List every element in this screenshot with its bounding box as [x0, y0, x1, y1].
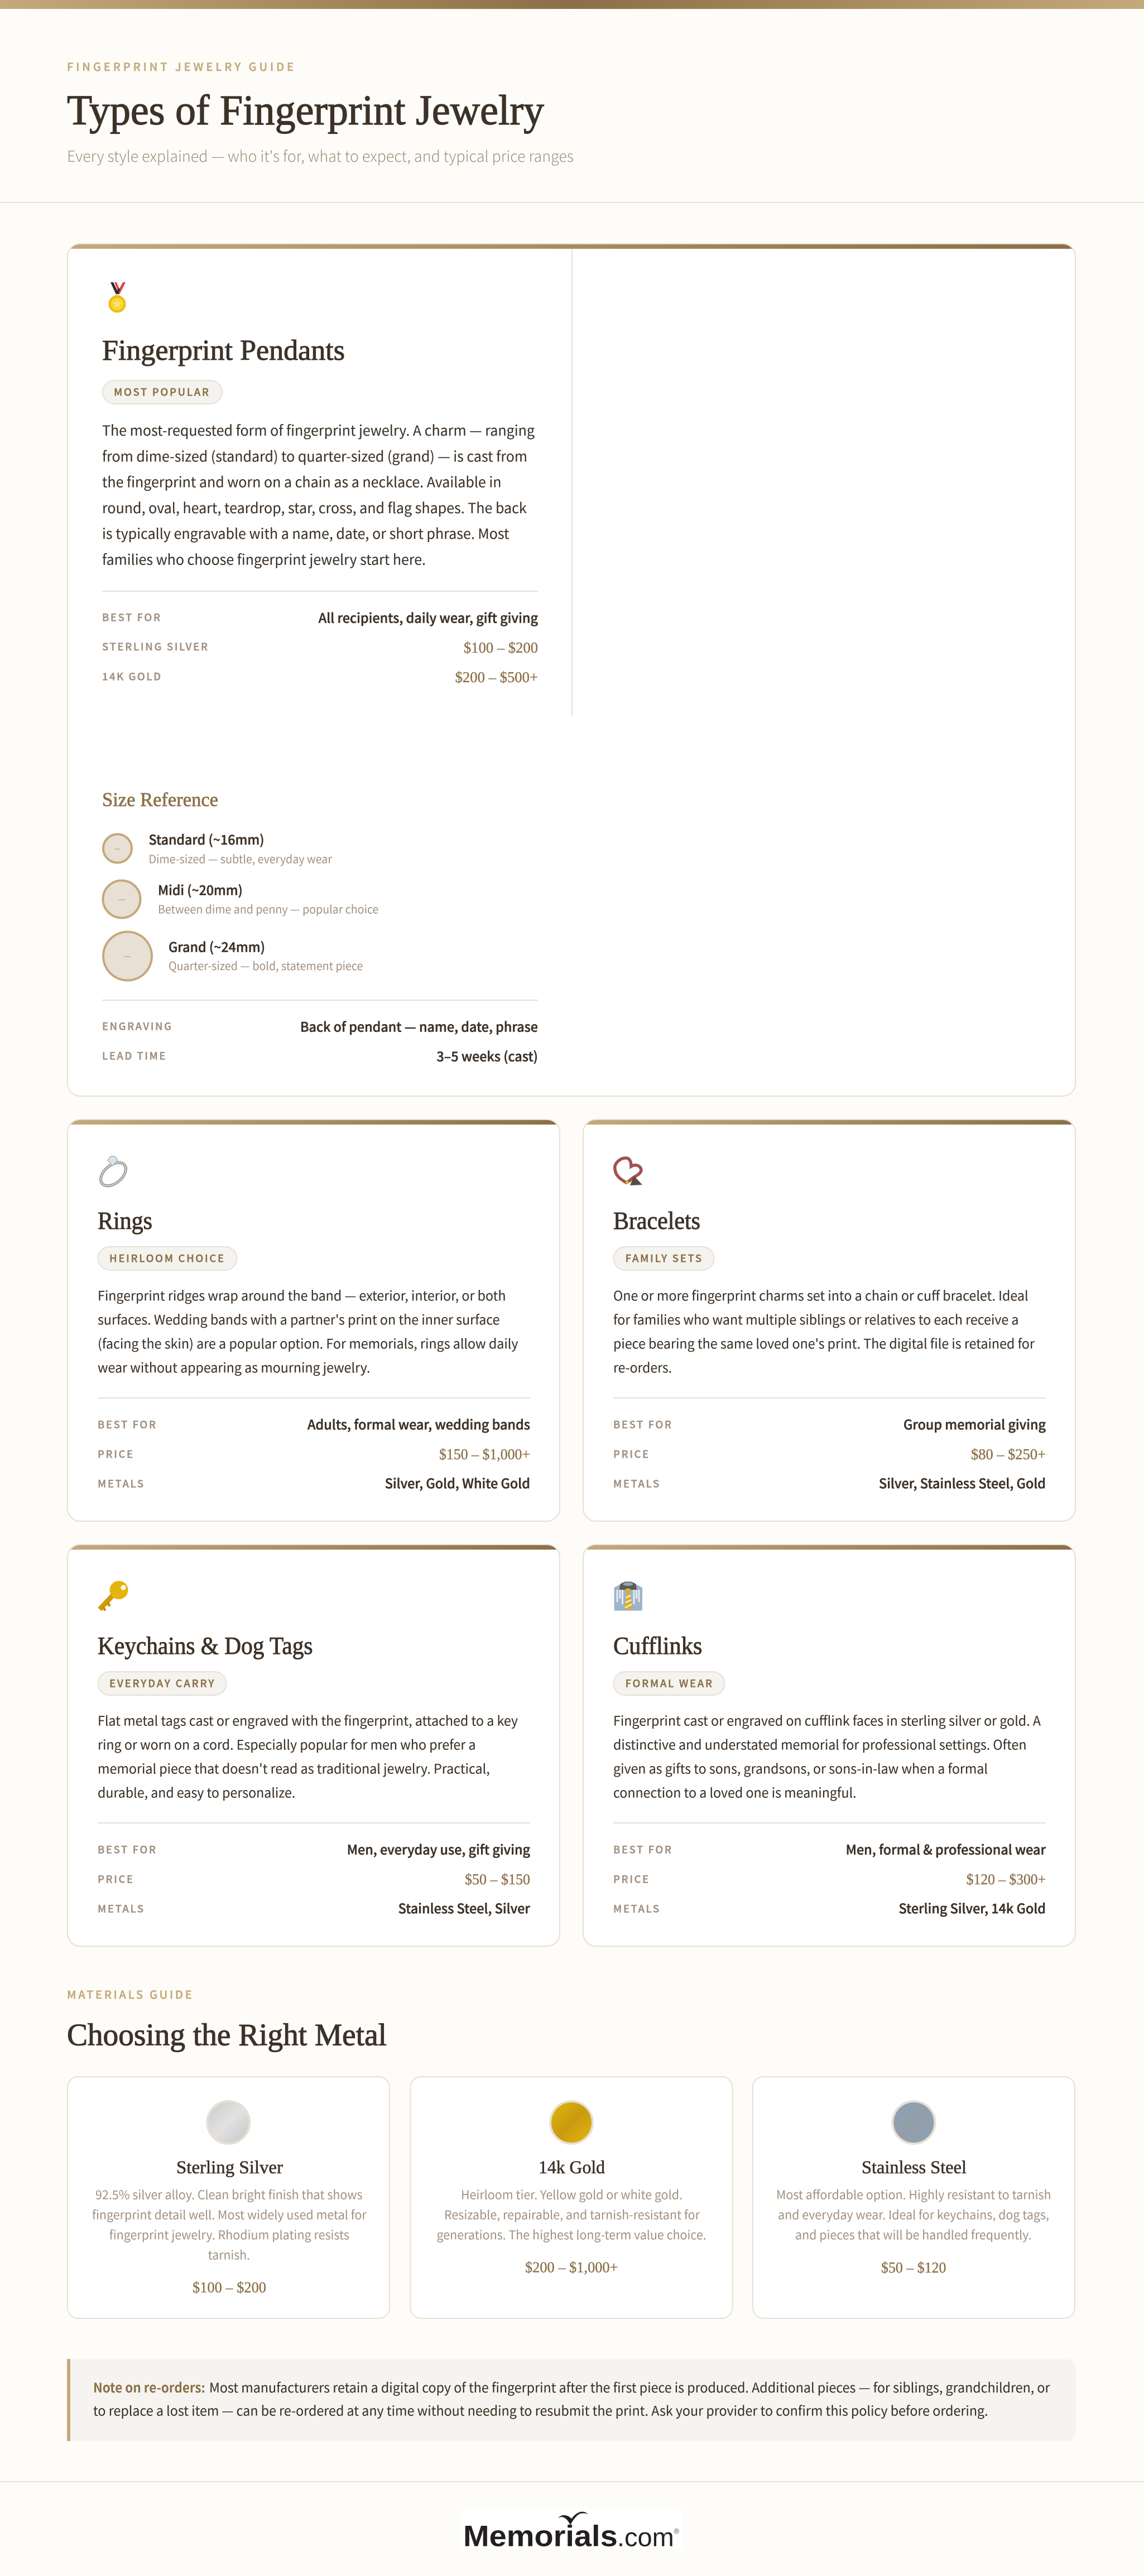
eyebrow: MATERIALS GUIDE	[67, 1986, 192, 2002]
size: standard	[103, 829, 332, 866]
description: surfaces. Wedding bands with a partner's print on the inner surface	[98, 1310, 500, 1329]
description: Flat metal tags cast or engraved with the fingerprint, attached to a key	[98, 1711, 518, 1730]
logo: Memorials.com: .com	[617, 2522, 674, 2551]
badge	[98, 1672, 227, 1695]
spec rows: Adults, formal wear, wedding bands	[307, 1415, 530, 1434]
engraving and lead time rows: 3–5 weeks (cast)	[436, 1046, 538, 1065]
panel: sterling silver	[68, 2077, 390, 2318]
description	[613, 1286, 1035, 1376]
spec rows: $120 – $300+	[967, 1871, 1046, 1888]
description: Most affordable option. Highly resistant to tarnish	[776, 2186, 1051, 2203]
spec rows: PRICE	[613, 1871, 648, 1886]
description: given as gifts to sons, grandsons, or sons-in-law when a formal	[613, 1758, 988, 1777]
size: standard: —	[114, 843, 121, 854]
spec rows: Silver, Stainless Steel, Gold	[879, 1473, 1046, 1492]
callout: note on re-orders: to replace a lost item — can be re-ordered at any time without needing to resubmit the print. Ask your provider to confirm this policy before ordering.	[93, 2401, 988, 2420]
spec rows	[613, 1415, 1046, 1492]
panel: fingerprint pendants	[68, 244, 1075, 1096]
badge	[614, 1672, 724, 1695]
description: ring or worn on a cord. Especially popular for men who prefer a	[98, 1735, 476, 1754]
spec rows: BEST FOR	[613, 1842, 671, 1856]
spec rows	[98, 1415, 530, 1492]
badge: FAMILY SETS	[626, 1251, 701, 1265]
panel: 14k gold	[411, 2077, 732, 2318]
icon: medal	[108, 282, 126, 312]
spec rows	[613, 1840, 1046, 1917]
description: wear without appearing as mourning jewelry.	[98, 1357, 370, 1376]
heading: Cufflinks	[613, 1632, 702, 1660]
spec rows: Group memorial giving	[903, 1415, 1046, 1434]
description: tarnish.	[208, 2246, 250, 2264]
badge	[614, 1247, 714, 1270]
spec rows: Stainless Steel, Silver	[398, 1898, 530, 1917]
description: the fingerprint and worn on a chain as a necklace. Available in	[102, 471, 501, 492]
price: $100 – $200	[193, 2279, 266, 2295]
panel: stainless steel	[753, 2077, 1075, 2318]
icon: beads	[615, 1158, 642, 1185]
description	[776, 2186, 1051, 2244]
description: Fingerprint ridges wrap around the band — exterior, interior, or both	[98, 1286, 506, 1305]
callout: note on re-orders: Note on re-orders:	[93, 2377, 205, 2396]
top accent bar	[0, 0, 1144, 9]
size: standard: Standard (~16mm)	[148, 829, 265, 848]
badge	[103, 380, 222, 404]
spec rows: $50 – $150	[465, 1871, 530, 1888]
icon: ring	[97, 1156, 130, 1190]
description: fingerprint jewelry. Rhodium plating resists	[109, 2226, 349, 2244]
description	[92, 2186, 367, 2264]
description: round, oval, heart, teardrop, star, cross, and flag shapes. The back	[102, 497, 527, 518]
size: grand: Quarter-sized — bold, statement piece	[169, 957, 363, 973]
description: is typically engravable with a name, date, or short phrase. Most	[102, 523, 509, 543]
description: for families who want multiple siblings or relatives to each receive a	[613, 1310, 1019, 1329]
engraving and lead time rows: Back of pendant — name, date, phrase	[300, 1016, 538, 1035]
spec rows: PRICE	[98, 1871, 133, 1886]
title: Types of Fingerprint Jewelry	[67, 87, 544, 134]
name: Stainless Steel	[862, 2158, 967, 2178]
callout: note on re-orders	[67, 2359, 1076, 2441]
spec rows: BEST FOR	[102, 610, 160, 625]
description: and pieces that will be handled frequently.	[795, 2226, 1032, 2244]
description: The most-requested form of fingerprint jewelry. A charm — ranging	[102, 419, 535, 440]
description: families who choose fingerprint jewelry start here.	[102, 549, 426, 569]
size: midi: —	[118, 894, 125, 905]
spec rows: $150 – $1,000+	[439, 1446, 530, 1463]
badge: FORMAL WEAR	[626, 1676, 712, 1690]
description: distinctive and understated memorial for professional settings. Often	[613, 1735, 1027, 1754]
description: from dime-sized (standard) to quarter-sized (grand) — is cast from	[102, 445, 527, 466]
icon: key	[99, 1581, 128, 1610]
description: re-orders.	[613, 1357, 672, 1376]
engraving and lead time rows	[102, 1016, 538, 1065]
callout: note on re-orders: Most manufacturers retain a digital copy of the fingerprint after the first piece is produced. Additional pieces — for siblings, grandchildren, or	[209, 2377, 1050, 2396]
swatch: gold	[550, 2101, 593, 2144]
description: memorial piece that doesn't read as traditional jewelry. Practical,	[98, 1758, 490, 1777]
description	[98, 1286, 518, 1376]
description: (facing the skin) are a popular option. For memorials, rings allow daily	[98, 1333, 518, 1352]
description	[98, 1711, 518, 1801]
price: $200 – $1,000+	[525, 2259, 618, 2276]
logo: Memorials.com	[461, 2509, 682, 2553]
badge: EVERYDAY CARRY	[109, 1676, 214, 1690]
spec rows: $80 – $250+	[971, 1446, 1046, 1463]
spec rows: Silver, Gold, White Gold	[385, 1473, 530, 1492]
engraving and lead time rows: LEAD TIME	[102, 1049, 165, 1063]
spec rows: Sterling Silver, 14k Gold	[898, 1898, 1046, 1917]
panel: cufflinks	[583, 1545, 1075, 1946]
size reference heading: Size Reference	[102, 789, 218, 811]
icon: shirt and tie	[614, 1581, 642, 1611]
spec rows: 14K GOLD	[102, 669, 161, 684]
size: grand: Grand (~24mm)	[169, 937, 265, 956]
subtitle: Every style explained — who it's for, what to expect, and typical price ranges	[67, 144, 574, 166]
size: midi: Between dime and penny — popular choice	[158, 900, 378, 917]
materials heading	[67, 1986, 387, 2053]
spec rows: BEST FOR	[98, 1417, 156, 1431]
logo bird	[558, 2512, 588, 2525]
name: Sterling Silver	[176, 2158, 283, 2178]
spec rows	[98, 1840, 530, 1917]
spec rows: Men, formal & professional wear	[846, 1840, 1046, 1859]
spec rows	[102, 608, 538, 686]
panel: rings	[68, 1120, 560, 1521]
swatch: silver	[207, 2101, 249, 2144]
description: Fingerprint cast or engraved on cufflink faces in sterling silver or gold. A	[613, 1711, 1041, 1730]
spec rows: Men, everyday use, gift giving	[347, 1840, 530, 1859]
section title: Choosing the Right Metal	[67, 2018, 387, 2053]
size: standard: Dime-sized — subtle, everyday wear	[148, 850, 332, 866]
logo wordmark: Memorials	[463, 2520, 618, 2553]
heading: Keychains & Dog Tags	[98, 1632, 313, 1660]
size: grand: —	[124, 951, 131, 962]
spec rows: STERLING SILVER	[102, 639, 208, 654]
spec rows: PRICE	[98, 1446, 133, 1461]
spec rows: METALS	[98, 1477, 143, 1491]
size: midi: Midi (~20mm)	[158, 880, 243, 899]
description: 92.5% silver alloy. Clean bright finish that shows	[95, 2186, 363, 2203]
description: generations. The highest long-term value choice.	[436, 2226, 706, 2244]
description: durable, and easy to personalize.	[98, 1782, 295, 1801]
size: grand	[103, 932, 363, 981]
logo: Memorials.com: ®	[674, 2527, 680, 2535]
badge: MOST POPULAR	[114, 385, 209, 399]
description: and everyday wear. Ideal for keychains, dog tags,	[778, 2206, 1049, 2223]
size: midi	[103, 880, 378, 918]
spec rows: BEST FOR	[98, 1842, 156, 1856]
heading: Rings	[98, 1207, 152, 1234]
spec rows: METALS	[98, 1902, 143, 1916]
description: piece bearing the same loved one's print. The digital file is retained for	[613, 1333, 1035, 1352]
name: 14k Gold	[539, 2158, 605, 2178]
heading: Bracelets	[613, 1207, 700, 1234]
description	[436, 2186, 706, 2244]
eyebrow: FINGERPRINT JEWELRY GUIDE	[67, 58, 294, 74]
description: One or more fingerprint charms set into a chain or cuff bracelet. Ideal	[613, 1286, 1028, 1305]
spec rows: METALS	[613, 1902, 659, 1916]
spec rows: All recipients, daily wear, gift giving	[319, 608, 538, 627]
heading: Fingerprint Pendants	[102, 335, 345, 366]
spec rows: $100 – $200	[464, 639, 538, 656]
spec rows: $200 – $500+	[455, 669, 538, 686]
description: fingerprint detail well. Most widely used metal for	[92, 2206, 367, 2223]
badge: HEIRLOOM CHOICE	[109, 1251, 224, 1265]
description	[613, 1711, 1041, 1801]
engraving and lead time rows: ENGRAVING	[102, 1019, 171, 1033]
description: Heirloom tier. Yellow gold or white gold.	[461, 2186, 682, 2203]
header	[67, 58, 574, 166]
description: Resizable, repairable, and tarnish-resistant for	[444, 2206, 700, 2223]
swatch: steel	[893, 2101, 935, 2144]
spec rows: PRICE	[613, 1446, 648, 1461]
spec rows: BEST FOR	[613, 1417, 671, 1431]
price: $50 – $120	[881, 2259, 946, 2276]
description: connection to a loved one is meaningful.	[613, 1782, 857, 1801]
panel: bracelets	[583, 1120, 1075, 1521]
panel: keychains and dog tags	[68, 1545, 560, 1946]
spec rows: METALS	[613, 1477, 659, 1491]
description	[102, 419, 535, 569]
badge	[98, 1247, 237, 1270]
